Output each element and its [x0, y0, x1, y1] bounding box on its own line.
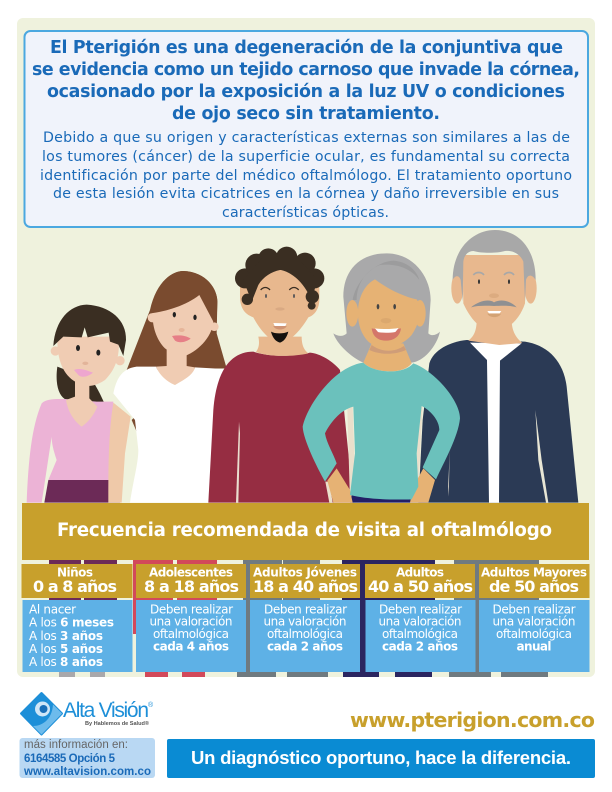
column header: 0 a 8 años [33, 577, 117, 596]
tagline bar [167, 739, 595, 778]
column body [22, 600, 132, 672]
column: adultos [365, 564, 476, 672]
column body: una valoración [378, 614, 462, 628]
illustration: five people of different ages [27, 230, 578, 503]
panel: intro text box [24, 31, 588, 227]
text block: explanation: de esta lesión evita cicatrices en la córnea y daño irreversible en sus [53, 186, 559, 202]
text block: explanation: los tumores (cáncer) de la superficie ocular, es fundamental su correcta [42, 149, 570, 165]
column header: 18 a 40 años [253, 577, 358, 596]
column body: Deben realizar [379, 602, 462, 616]
column body: cada 2 años [267, 640, 343, 654]
icon: eye diamond [21, 693, 62, 734]
tagline bar: Un diagnóstico oportuno, hace la diferencia. [191, 747, 571, 768]
column body [136, 600, 246, 672]
column header: de 50 años [489, 577, 579, 596]
column body: oftalmológica [153, 627, 229, 641]
text block: explanation: Debido a que su origen y características externas son similares a las de [43, 130, 570, 146]
heading: definition: se evidencia como un tejido carnoso que invade la córnea, [32, 60, 580, 80]
column body [479, 600, 590, 672]
person: girl [27, 305, 126, 503]
heading: definition: ocasionado por la exposición a la luz UV o condiciones [47, 82, 565, 102]
legs behind the table [49, 555, 548, 677]
column body: cada 4 años [153, 640, 229, 654]
heading: definition [32, 38, 580, 124]
contact info box: 6164585 Opción 5 [24, 753, 116, 765]
column header [22, 564, 132, 598]
person: young man [208, 247, 353, 503]
banner: recommended frequency [22, 503, 589, 560]
text block: explanation: características ópticas. [222, 205, 389, 221]
column body: Al nacer [29, 602, 76, 616]
contact info box [20, 738, 155, 778]
contact info box: más información en: [24, 739, 128, 751]
column body: A los 3 años [29, 629, 103, 643]
text block: explanation: identificación por parte del médico oftalmólogo. El tratamiento oportuno [40, 168, 572, 184]
logo: Alta Visión: Alta Visión [63, 699, 149, 722]
column body: una valoración [492, 614, 576, 628]
column header: Niños [57, 566, 93, 580]
logo: Alta Visión [21, 693, 154, 734]
column: adolescentes [136, 564, 246, 672]
person: teenage girl [108, 271, 227, 503]
website url: www.pterigion.com.co [350, 708, 595, 732]
column body: oftalmológica [382, 627, 458, 641]
heading: definition: de ojo seco sin tratamiento. [172, 104, 440, 124]
column: niños [22, 564, 132, 672]
column header: 40 a 50 años [368, 577, 473, 596]
column header: Adultos Jóvenes [253, 566, 357, 580]
column body: A los 5 años [29, 642, 103, 656]
heading: definition: El Pterigión es una degeneración de la conjuntiva que [50, 38, 563, 58]
column body: cada 2 años [382, 640, 458, 654]
column body: A los 8 años [29, 655, 103, 669]
column: adultos jóvenes [250, 564, 360, 672]
column header: Adultos [396, 566, 444, 580]
banner: recommended frequency: Frecuencia recomendada de visita al oftalmólogo [57, 520, 552, 541]
column body [366, 600, 476, 672]
text block: explanation [40, 130, 572, 221]
column body: una valoración [264, 614, 346, 628]
person: older man [418, 230, 578, 503]
column body: oftalmológica [267, 627, 343, 641]
logo: Alta Visión: ® [148, 701, 154, 709]
column body: Deben realizar [150, 602, 233, 616]
contact info box: www.altavision.com.co [23, 766, 151, 778]
column body: oftalmológica [496, 627, 572, 641]
column body: anual [516, 640, 552, 654]
column header [136, 564, 246, 598]
panel: background [17, 18, 595, 677]
column header: Adultos Mayores [481, 566, 587, 580]
column body: A los 6 meses [29, 616, 114, 630]
person: older woman [303, 253, 460, 503]
column body [250, 600, 360, 672]
column header [250, 564, 360, 598]
column body: Deben realizar [492, 602, 576, 616]
column header: Adolescentes [149, 566, 233, 580]
column header [365, 564, 475, 598]
column header [479, 564, 590, 598]
column body: una valoración [150, 614, 232, 628]
column header: 8 a 18 años [144, 577, 239, 596]
column: adultos mayores [479, 564, 590, 672]
logo: Alta Visión: By Hablemos de Salud® [85, 720, 150, 727]
column body: Deben realizar [264, 602, 347, 616]
